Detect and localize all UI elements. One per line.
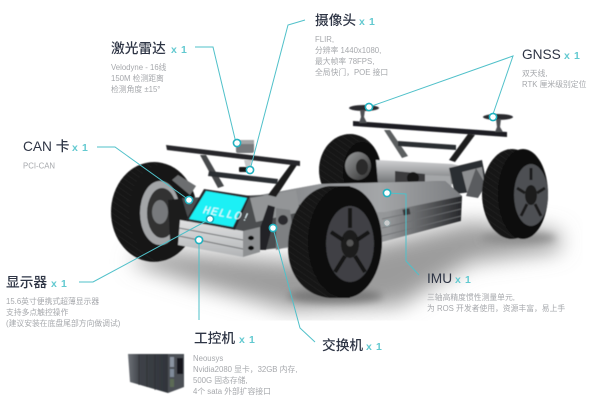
leader line: lidar: [195, 47, 236, 143]
label: switch: [322, 337, 382, 353]
label: industrial PC: [193, 331, 297, 396]
GNSS antennas: [349, 105, 513, 132]
label: CAN card: CAN 卡: [23, 139, 70, 154]
leader line: camera: [250, 20, 305, 170]
front right wheel: [288, 186, 382, 298]
label: lidar: 激光雷达: [111, 40, 166, 56]
label: industrial PC: 500G 固态存储,: [193, 375, 248, 385]
label: GNSS: GNSS: [522, 47, 561, 62]
lidar: [236, 140, 254, 153]
rear-right wheel: [482, 149, 548, 239]
label: display: 15.6英寸便携式超薄显示器: [6, 296, 99, 306]
label: lidar: x 1: [171, 44, 187, 56]
label: industrial PC: 工控机: [194, 331, 235, 346]
label: camera: 分辨率 1440x1080,: [315, 45, 381, 55]
icon: industrial PC box: [128, 354, 184, 393]
marker dots: [185, 103, 497, 244]
label: display: 支持多点触控操作: [6, 307, 69, 317]
label: IMU: 为 ROS 开发者使用，资源丰富，易上手: [427, 303, 565, 313]
label: CAN card: x 1: [72, 142, 88, 154]
label: IMU: [427, 271, 565, 313]
label: display: 显示器: [6, 275, 47, 290]
label: CAN card: [23, 139, 88, 170]
label: GNSS: 双天线,: [522, 68, 548, 78]
label: display: x 1: [51, 278, 67, 290]
label: IMU: 三轴高精度惯性测量单元,: [427, 292, 515, 302]
rear far wheel: [319, 134, 381, 206]
leader line: industrial PC: [198, 240, 200, 320]
leader line: CAN card: [97, 147, 189, 200]
rear suspension and motor module: [376, 160, 488, 198]
ground shadow: [130, 222, 560, 310]
leader line: IMU: [387, 193, 419, 275]
leader line: display: [79, 219, 210, 282]
left wheel: [111, 162, 197, 262]
front extrusion with end plate: [178, 220, 260, 257]
label: industrial PC: Nvidia2080 显卡，32GB 内存,: [193, 364, 297, 374]
label: camera: 最大帧率 78FPS,: [315, 56, 374, 66]
label: camera: [315, 12, 388, 77]
label: IMU: IMU: [427, 271, 452, 286]
label: lidar: [111, 40, 187, 94]
display screen: [186, 189, 253, 230]
label: GNSS: RTK 厘米级别定位: [522, 79, 587, 89]
label: display: (建议安装在底盘尾部方向做调试): [6, 318, 121, 328]
vehicle chassis illustration: [111, 105, 560, 310]
front sensor frame: [166, 145, 300, 197]
label: GNSS: x 1: [564, 50, 580, 62]
label: IMU: x 1: [455, 274, 471, 286]
label: industrial PC: Neousys: [193, 354, 223, 363]
rear sensor frame: [353, 121, 507, 162]
label: camera: FLIR,: [315, 35, 334, 44]
display screen: HELLO!: [200, 204, 253, 225]
leader line: GNSS: [369, 56, 513, 117]
label: switch: x 1: [366, 341, 382, 353]
label: lidar: Velodyne - 16线: [111, 62, 167, 72]
front suspension module: [182, 190, 300, 250]
label: lidar: 检测角度 ±15°: [111, 84, 160, 94]
label: switch: 交换机: [322, 337, 363, 353]
label: GNSS: [522, 47, 587, 89]
label: camera: 摄像头: [315, 12, 356, 28]
label: industrial PC: 4个 sata 外部扩容接口: [193, 386, 271, 396]
label: CAN card: PCI-CAN: [23, 162, 55, 170]
label: lidar: 150M 检测距离: [111, 73, 164, 83]
camera: [239, 160, 253, 172]
label: industrial PC: x 1: [239, 334, 255, 346]
leader line: switch: [273, 228, 315, 342]
label: camera: 全局快门，POE 接口: [315, 67, 388, 77]
label: display: [6, 275, 121, 328]
aluminium deck: [255, 181, 462, 250]
label: camera: x 1: [359, 16, 375, 28]
